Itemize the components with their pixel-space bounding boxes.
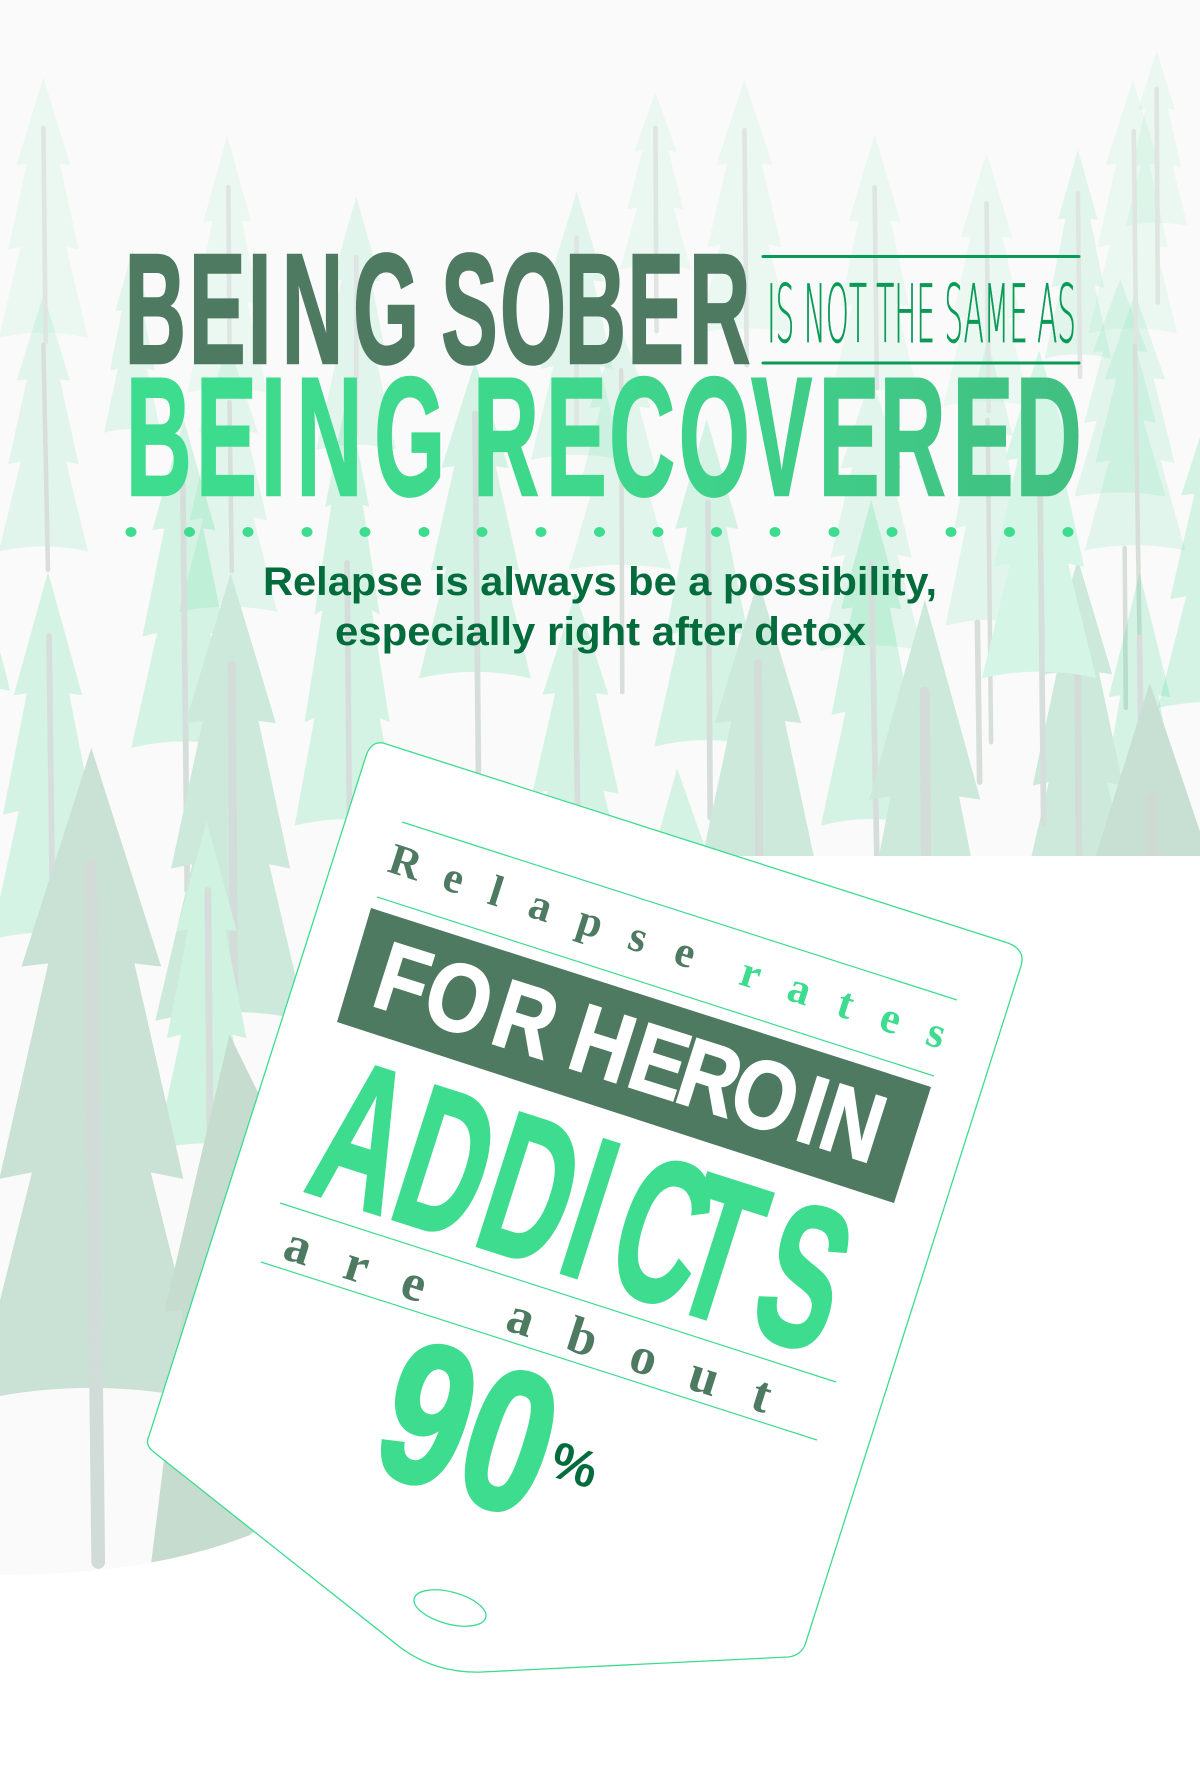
- subtitle: Relapse is always be a possibility,: [263, 560, 937, 604]
- text: relapse rates: Relapse: [383, 834, 732, 988]
- pale mint tree on the right: [982, 351, 1096, 678]
- title line: being recovered: BEING RECOVERED: [126, 342, 1082, 531]
- stat: 90: 90: [354, 1297, 584, 1561]
- large front tree: [0, 748, 184, 1569]
- dark tree behind phone: [151, 1035, 258, 1562]
- title line: being sober: BEING SOBER: [125, 221, 750, 397]
- far row of pale trees: [0, 51, 1187, 782]
- text: are about: are about: [277, 1215, 779, 1425]
- title: [125, 221, 1082, 531]
- middle row of mint trees: [0, 362, 1200, 943]
- banner: [337, 908, 931, 1203]
- home button: [410, 1583, 490, 1633]
- rule above phrase: [763, 255, 1079, 258]
- text: relapse rates: rates: [734, 947, 952, 1058]
- text: for heroin: FOR HEROIN: [363, 922, 898, 1184]
- near row of sage trees: [155, 351, 1200, 1197]
- rule lines: [261, 822, 957, 1440]
- phone: [147, 743, 1022, 1672]
- text: addicts: ADDICTS: [289, 1016, 875, 1397]
- subtitle: [263, 560, 937, 654]
- rule below phrase: [763, 362, 1079, 364]
- subtitle: especially right after detox: [335, 610, 866, 654]
- phone body: [147, 743, 1022, 1672]
- percent sign: %: [543, 1431, 605, 1500]
- dotted divider: [126, 527, 1074, 537]
